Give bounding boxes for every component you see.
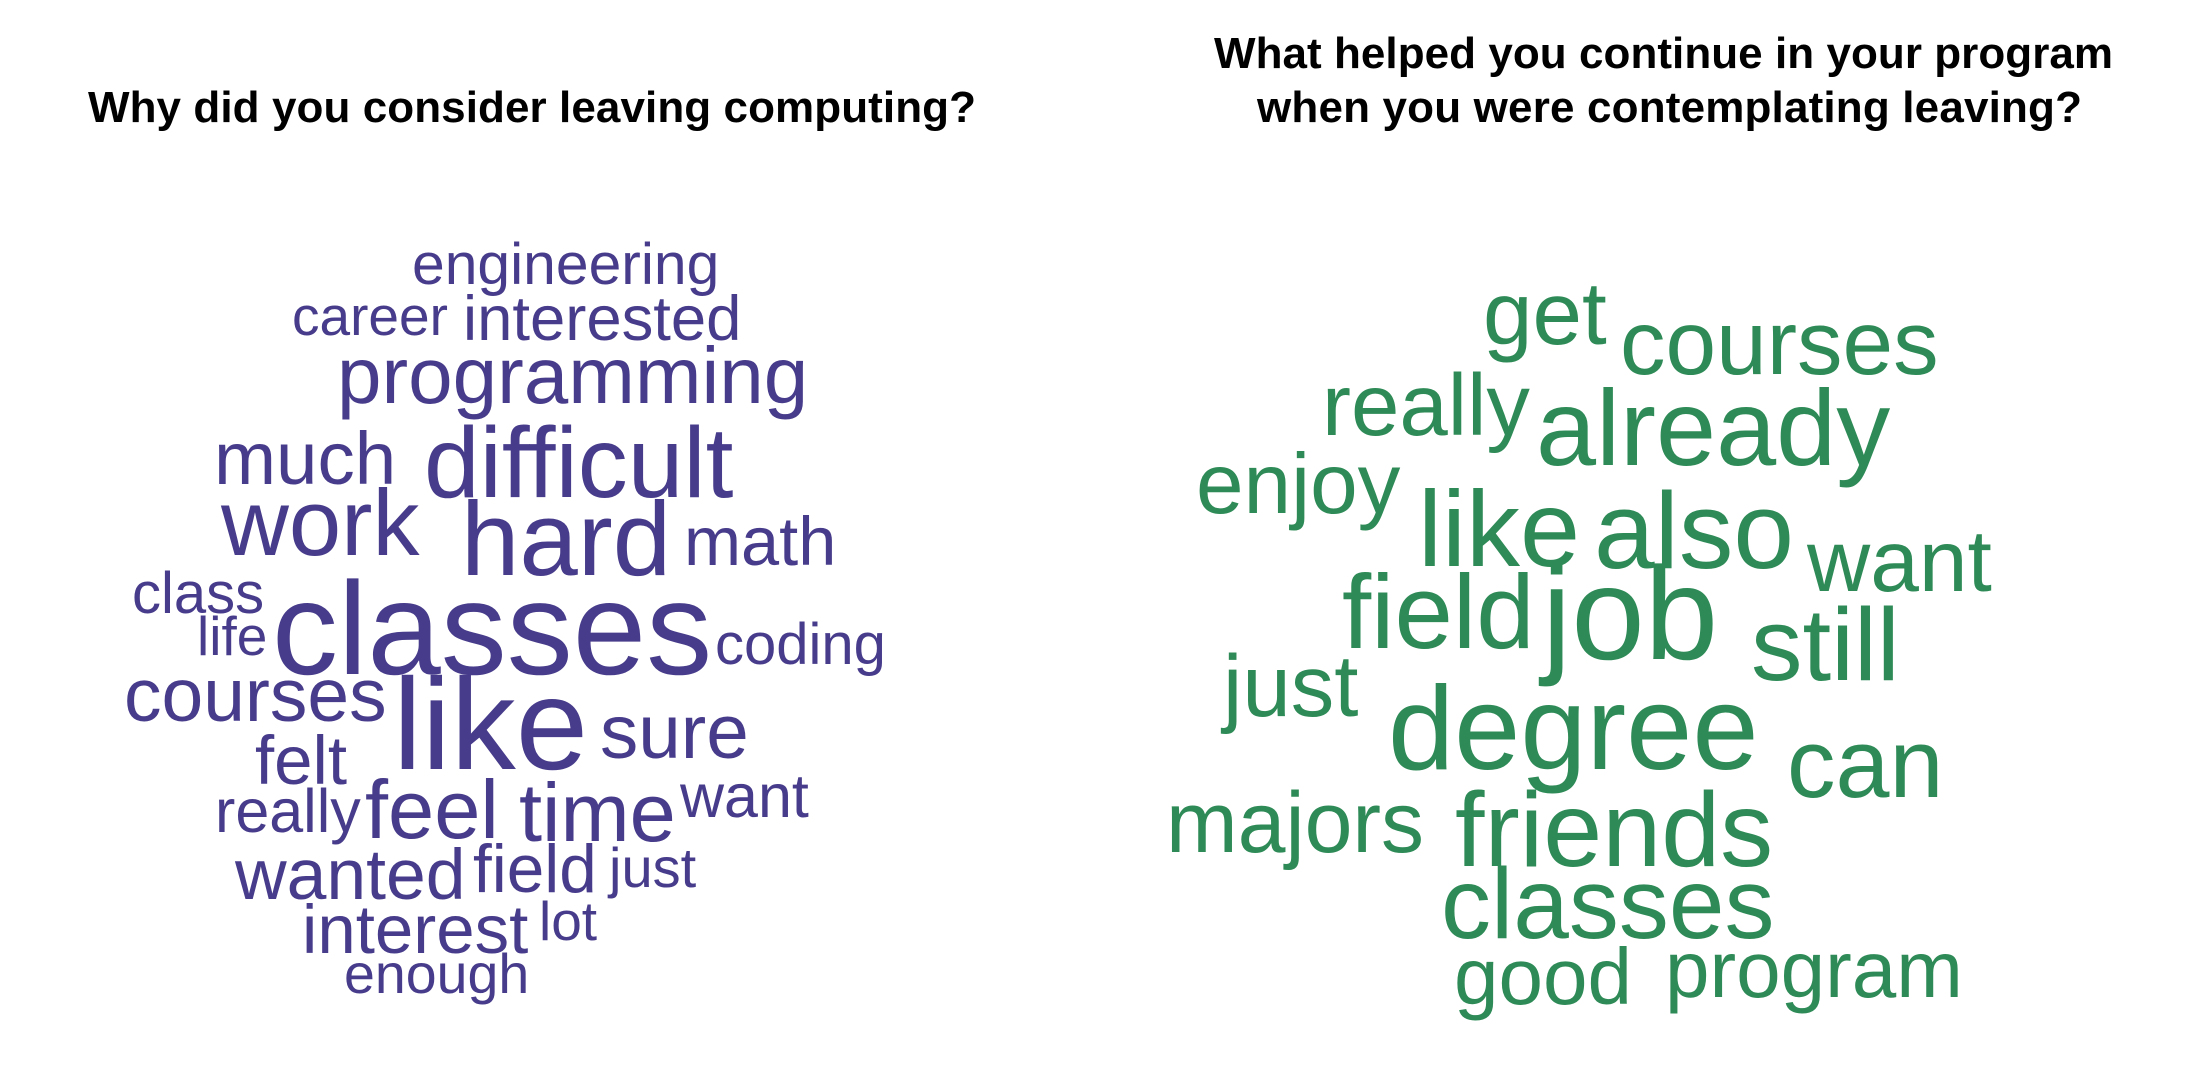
heading: what helped continue (1214, 29, 2113, 132)
word: math: math (684, 503, 836, 580)
word: like: like (393, 651, 588, 797)
heading: what helped continue: What helped you continue in your program (1214, 29, 2113, 78)
word: want: want (679, 762, 809, 830)
word: just: just (607, 836, 697, 899)
word: courses: courses (1620, 293, 1939, 394)
word: already: already (1536, 367, 1890, 488)
word cloud: reasons for leaving (124, 232, 886, 1005)
word: job: job (1538, 540, 1718, 687)
word: field: field (1342, 554, 1535, 671)
word: majors: majors (1166, 775, 1424, 871)
word: interest: interest (302, 891, 528, 968)
word: wanted: wanted (234, 835, 466, 915)
word: interested: interested (463, 284, 741, 354)
word: sure: sure (600, 690, 749, 775)
word: also: also (1594, 470, 1794, 592)
word: get: get (1483, 263, 1607, 363)
word: courses: courses (124, 653, 387, 737)
heading: what helped continue: when you were contemplating leaving? (1256, 83, 2082, 132)
word: friends: friends (1455, 771, 1773, 889)
word: classes: classes (272, 555, 712, 702)
word: still: still (1751, 587, 1900, 702)
word: really: really (215, 777, 361, 845)
word: like: like (1418, 468, 1580, 589)
word: programming: programming (337, 331, 808, 420)
word cloud: reasons for staying (1166, 263, 1992, 1021)
word: class: class (132, 561, 264, 626)
word: engineering: engineering (412, 232, 719, 297)
word: enough: enough (344, 943, 529, 1005)
heading: why consider leaving: Why did you consider leaving computing? (88, 83, 976, 132)
word: career: career (292, 285, 448, 347)
word: time: time (519, 766, 676, 859)
word: program: program (1665, 925, 1963, 1014)
word: life: life (197, 605, 267, 667)
word: work: work (220, 470, 420, 575)
word: field: field (473, 832, 597, 907)
word: can: can (1787, 709, 1943, 818)
word: hard: hard (461, 481, 671, 598)
word: lot: lot (539, 890, 597, 952)
word: classes: classes (1441, 848, 1774, 960)
word: want: want (1806, 512, 1992, 610)
word: difficult: difficult (424, 407, 734, 519)
word: feel: feel (365, 763, 499, 856)
word: coding: coding (715, 612, 886, 677)
word: much: much (214, 417, 396, 500)
word: degree: degree (1388, 662, 1759, 795)
word: felt: felt (255, 722, 347, 799)
word: good: good (1454, 932, 1632, 1021)
word: just: just (1220, 638, 1358, 735)
word: really: really (1322, 357, 1530, 454)
word: enjoy: enjoy (1196, 437, 1401, 532)
